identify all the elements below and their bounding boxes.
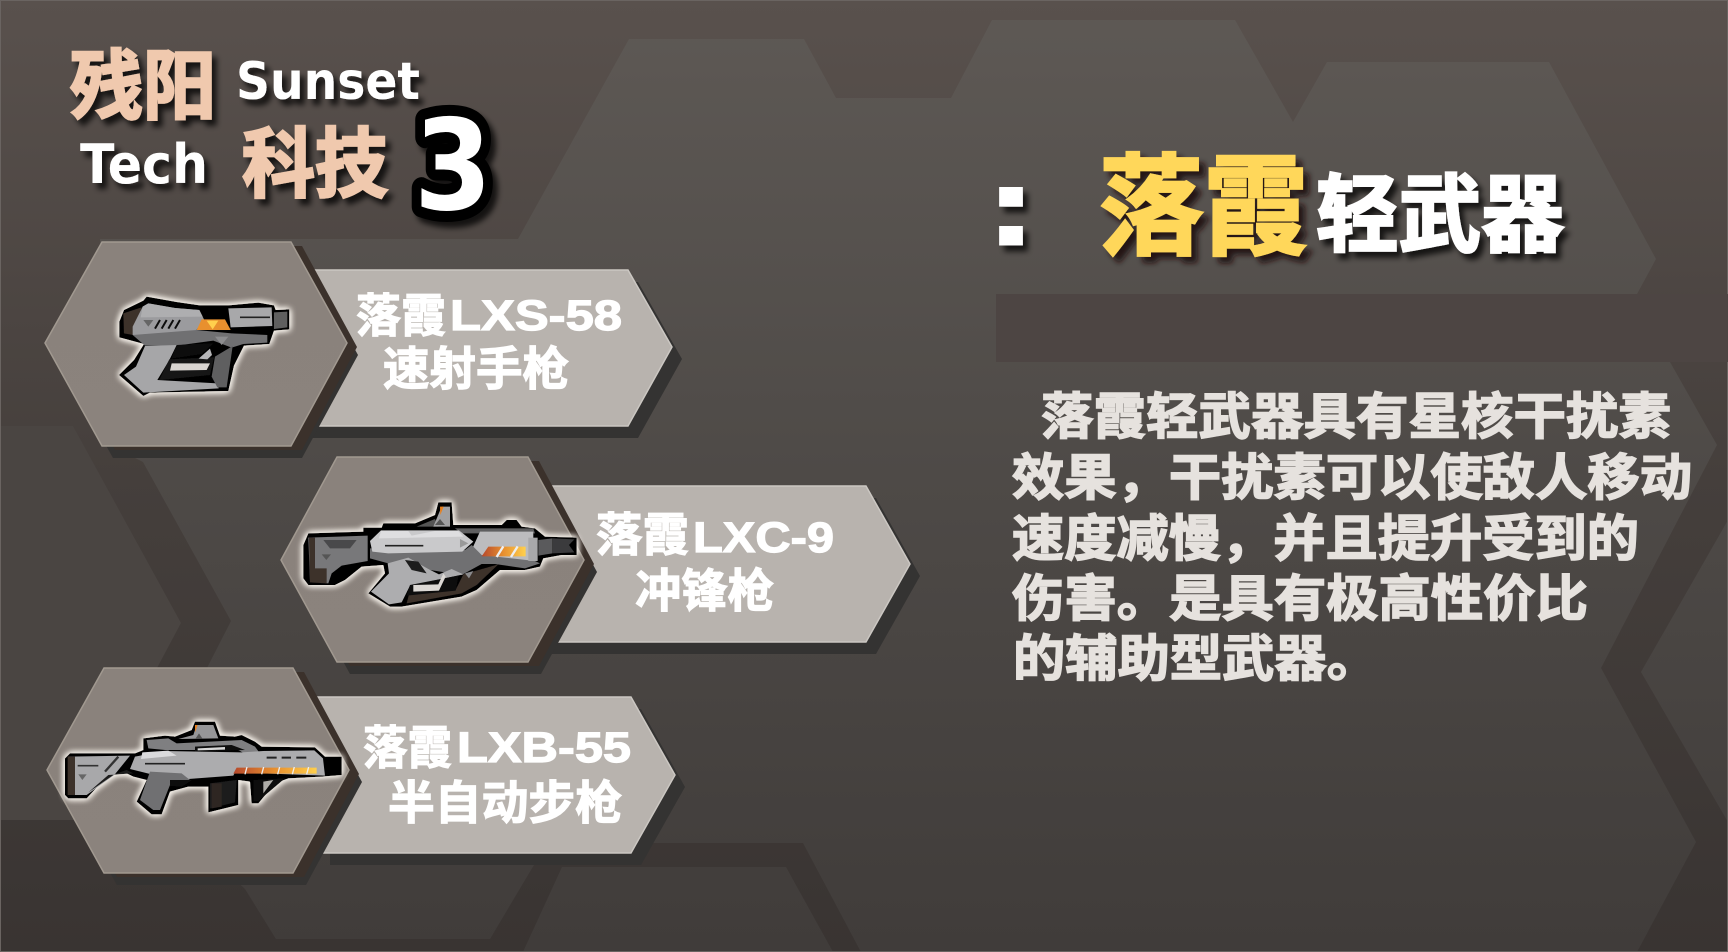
description text: 效果，干扰素可以使敌人移动 <box>1012 450 1692 506</box>
panel: LXC-9 submachine gun <box>281 457 920 674</box>
description text: 落霞轻武器具有星核干扰素 <box>1041 389 1671 445</box>
label: 落霞LXB-55 半自动步枪: 半自动步枪 <box>388 777 622 829</box>
logo: 残阳 Sunset Tech 科技 3: 残阳 <box>70 45 216 130</box>
heading band <box>996 294 1728 362</box>
logo: 残阳 Sunset Tech 科技 3: 3 <box>414 92 492 239</box>
description text: 伤害。是具有极高性价比 <box>1012 571 1588 627</box>
description text: 速度减慢，并且提升受到的 <box>1012 511 1639 567</box>
icon: submachine gun <box>303 502 577 607</box>
icon: rifle <box>65 722 342 814</box>
heading: ：落霞轻武器 <box>990 147 1564 270</box>
logo: 残阳 Sunset Tech 科技 3 <box>70 45 492 239</box>
panel: LXB-55 semi-automatic rifle <box>47 668 685 885</box>
panel: LXS-58 pistol <box>45 242 682 458</box>
label: 落霞LXS-58 速射手枪: LXS-58 <box>450 292 622 340</box>
label: 落霞LXC-9 冲锋枪 <box>596 509 834 617</box>
icon: pistol <box>119 297 289 396</box>
description text: 的辅助型武器。 <box>1013 631 1379 687</box>
label: 落霞LXC-9 冲锋枪: 落霞 <box>596 509 689 561</box>
heading: ：落霞轻武器: 落霞 <box>1099 147 1308 270</box>
label: 落霞LXB-55 半自动步枪: LXB-55 <box>457 724 631 772</box>
description text <box>1012 389 1692 687</box>
logo: 残阳 Sunset Tech 科技 3: Tech <box>80 133 208 196</box>
label: 落霞LXS-58 速射手枪 <box>356 290 622 395</box>
label: 落霞LXS-58 速射手枪: 速射手枪 <box>383 343 569 395</box>
heading: ：落霞轻武器: 轻武器 <box>1316 169 1564 264</box>
label: 落霞LXS-58 速射手枪: 落霞 <box>356 290 446 342</box>
label: 落霞LXB-55 半自动步枪: 落霞 <box>363 722 452 774</box>
label: 落霞LXC-9 冲锋枪: LXC-9 <box>693 514 834 562</box>
heading: ：落霞轻武器: : <box>990 148 1032 266</box>
logo: 残阳 Sunset Tech 科技 3: Sunset <box>236 52 420 112</box>
label: 落霞LXB-55 半自动步枪 <box>363 722 631 829</box>
label: 落霞LXC-9 冲锋枪: 冲锋枪 <box>635 565 774 617</box>
logo: 残阳 Sunset Tech 科技 3: 科技 <box>242 123 388 208</box>
